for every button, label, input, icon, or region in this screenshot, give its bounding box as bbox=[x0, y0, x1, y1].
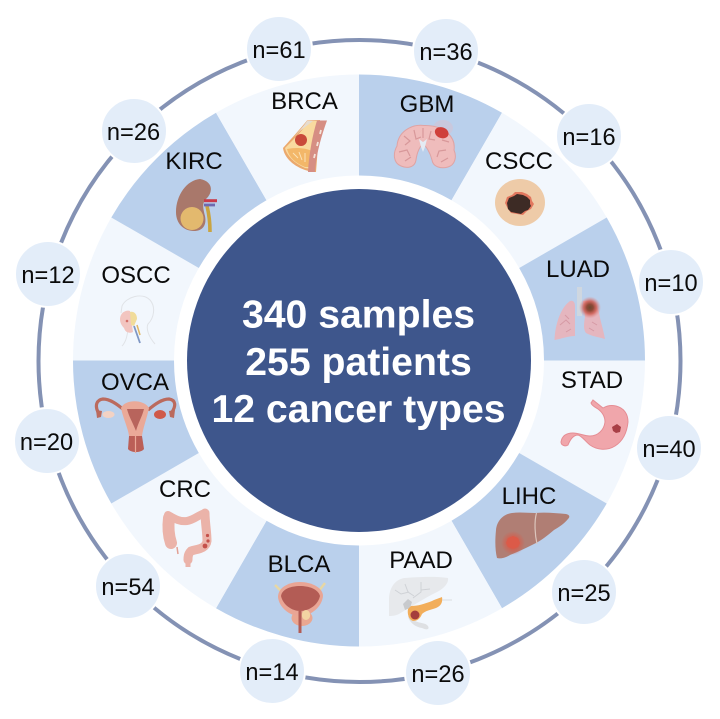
GBM label: GBM bbox=[400, 91, 454, 118]
OVCA sector bbox=[73, 360, 199, 504]
icon: pancreas bbox=[389, 577, 452, 629]
count bubble: LUAD n=10: n=10 bbox=[644, 271, 698, 297]
BRCA sector bbox=[216, 74, 359, 200]
LUAD label: LUAD bbox=[546, 256, 610, 283]
KIRC sector bbox=[111, 113, 266, 268]
count bubble: STAD n=40 bbox=[636, 415, 702, 481]
count bubble: PAAD n=26 bbox=[405, 640, 471, 706]
BLCA sector bbox=[216, 521, 359, 646]
count bubble: CRC n=54 bbox=[95, 553, 161, 619]
panel: CSCC bbox=[452, 113, 607, 268]
count bubble: LIHC n=25: n=25 bbox=[557, 581, 611, 607]
OSCC label: OSCC bbox=[101, 262, 171, 289]
center statistics text: 255 patients bbox=[245, 341, 472, 384]
PAAD sector bbox=[359, 521, 502, 646]
count bubble: BLCA n=14 bbox=[239, 638, 305, 704]
count bubble: PAAD n=26: n=26 bbox=[411, 662, 465, 688]
count bubble: BRCA n=61 bbox=[246, 16, 312, 82]
count bubble: OSCC n=12: n=12 bbox=[21, 263, 75, 289]
panel: LUAD bbox=[519, 218, 645, 360]
outer ring line bbox=[38, 40, 680, 682]
CSCC label: CSCC bbox=[485, 148, 553, 175]
panel: OSCC bbox=[73, 218, 199, 360]
count bubble: OVCA n=20 bbox=[14, 408, 80, 474]
center statistics text bbox=[211, 294, 506, 431]
CRC label: CRC bbox=[159, 476, 211, 503]
count bubble: STAD n=40: n=40 bbox=[642, 437, 696, 463]
panel: STAD bbox=[519, 360, 645, 504]
panel: CRC bbox=[111, 453, 266, 608]
PAAD label: PAAD bbox=[389, 547, 453, 574]
CSCC sector bbox=[452, 113, 607, 268]
icon: stomach bbox=[561, 400, 628, 449]
OVCA label: OVCA bbox=[101, 369, 169, 396]
icon: colon bbox=[168, 513, 210, 567]
BRCA label: BRCA bbox=[271, 88, 338, 115]
BLCA label: BLCA bbox=[268, 551, 330, 578]
icon: kidney bbox=[176, 179, 217, 232]
count bubble: KIRC n=26: n=26 bbox=[107, 120, 160, 146]
CRC sector bbox=[111, 453, 266, 608]
center statistics text: 340 samples bbox=[242, 294, 475, 336]
count bubble: LUAD n=10 bbox=[638, 249, 704, 315]
count bubble: BLCA n=14: n=14 bbox=[245, 660, 299, 686]
count bubble: CRC n=54: n=54 bbox=[101, 575, 155, 601]
count bubble: CSCC n=16: n=16 bbox=[562, 125, 616, 151]
center statistics text: 12 cancer types bbox=[211, 388, 506, 431]
count bubble: CSCC n=16 bbox=[556, 103, 622, 169]
icon: skin lesion bbox=[495, 179, 545, 226]
center circle bbox=[187, 189, 531, 532]
panel: BLCA bbox=[216, 521, 359, 646]
STAD sector bbox=[519, 360, 645, 504]
count bubble: GBM n=36 bbox=[413, 18, 479, 84]
icon: lungs bbox=[554, 287, 605, 340]
count bubble: OVCA n=20: n=20 bbox=[20, 430, 73, 456]
count bubble: GBM n=36: n=36 bbox=[419, 40, 473, 66]
count bubble: OSCC n=12 bbox=[15, 241, 81, 307]
icon: bladder bbox=[275, 582, 325, 633]
count bubble: KIRC n=26 bbox=[101, 98, 167, 164]
panel: BRCA bbox=[216, 74, 359, 200]
count bubble: BRCA n=61: n=61 bbox=[252, 38, 306, 64]
KIRC label: KIRC bbox=[165, 148, 223, 175]
icon: liver bbox=[495, 513, 569, 558]
STAD label: STAD bbox=[561, 367, 623, 394]
panel: OVCA bbox=[73, 360, 199, 504]
panel: KIRC bbox=[111, 113, 266, 268]
OSCC sector bbox=[73, 218, 199, 360]
icon: head and neck bbox=[120, 296, 155, 346]
LIHC label: LIHC bbox=[502, 483, 556, 510]
GBM sector bbox=[359, 74, 502, 200]
icon: brain bbox=[394, 120, 455, 168]
count bubble: LIHC n=25 bbox=[551, 559, 617, 625]
panel: LIHC bbox=[452, 453, 607, 608]
LUAD sector bbox=[519, 218, 645, 360]
icon: female reproductive system bbox=[96, 399, 175, 453]
icon: breast bbox=[283, 120, 327, 172]
LIHC sector bbox=[452, 453, 607, 608]
panel: PAAD bbox=[359, 521, 502, 646]
panel: GBM bbox=[359, 74, 502, 200]
